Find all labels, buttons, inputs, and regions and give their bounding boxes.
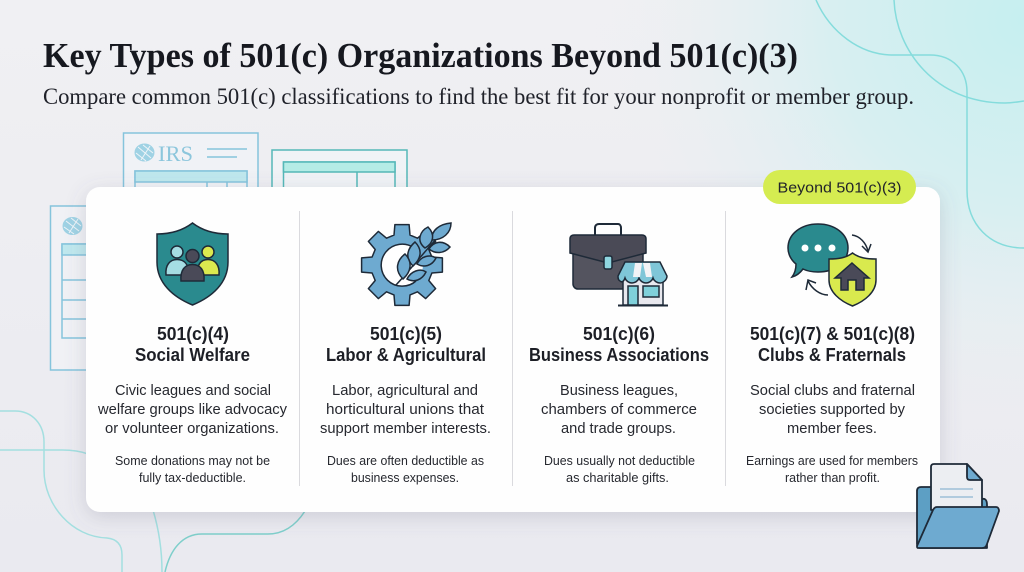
panel: 501(c)(5) Labor & Agricultural — [320, 223, 491, 485]
icon: gear with wheat — [362, 223, 451, 305]
decorative curves top right — [816, 0, 1024, 248]
panel: 501(c)(4) Social Welfare — [97, 223, 287, 485]
note: Dues are often deductible as — [327, 454, 484, 468]
description: Business leagues, — [560, 382, 678, 399]
note — [544, 454, 695, 485]
note: business expenses. — [351, 471, 459, 485]
IRS wordmark: IRS — [158, 141, 193, 166]
note: rather than profit. — [785, 471, 880, 485]
description: and trade groups. — [561, 420, 676, 437]
heading: Clubs & Fraternals — [758, 345, 906, 365]
heading: 501(c)(7) & 501(c)(8) — [750, 324, 915, 344]
description — [320, 382, 491, 437]
description: Civic leagues and social — [115, 382, 271, 399]
note: Earnings are used for members — [746, 454, 918, 468]
icon: briefcase and storefront — [570, 224, 668, 306]
heading: Business Associations — [529, 345, 709, 365]
description: or volunteer organizations. — [105, 420, 279, 437]
note — [327, 454, 484, 485]
heading — [135, 324, 250, 365]
description — [541, 382, 697, 437]
subtitle: Compare common 501(c) classifications to find the best fit for your nonprofit or member group. — [43, 84, 914, 109]
note: as charitable gifts. — [566, 471, 669, 485]
description — [97, 382, 287, 437]
icon: folder with document — [917, 464, 999, 548]
icon: shield with people — [157, 223, 228, 305]
heading — [529, 324, 709, 365]
note: Some donations may not be — [115, 454, 270, 468]
description: welfare groups like advocacy — [97, 401, 287, 418]
IRS form back left — [124, 133, 258, 223]
badge: Beyond 501(c)(3) — [763, 170, 916, 204]
description: Labor, agricultural and — [332, 382, 478, 399]
heading: Social Welfare — [135, 345, 250, 365]
main card — [86, 187, 940, 512]
note: fully tax-deductible. — [139, 471, 246, 485]
title: Key Types of 501(c) Organizations Beyond 501(c)(3) — [43, 37, 798, 75]
description: societies supported by — [759, 401, 905, 418]
description: horticultural unions that — [326, 401, 485, 418]
note — [746, 454, 918, 485]
badge: Beyond 501(c)(3): Beyond 501(c)(3) — [778, 180, 902, 196]
panel: 501(c)(6) Business Associations — [529, 224, 709, 485]
description — [750, 382, 915, 437]
heading: 501(c)(6) — [583, 324, 655, 344]
description: member fees. — [787, 420, 877, 437]
seal small — [62, 217, 82, 235]
icon: chat, shield, house — [788, 224, 876, 306]
heading — [326, 324, 486, 365]
form back center — [272, 150, 407, 210]
description: Social clubs and fraternal — [750, 382, 915, 399]
column dividers — [300, 211, 726, 486]
heading — [750, 324, 915, 365]
heading: 501(c)(5) — [370, 324, 442, 344]
description: chambers of commerce — [541, 401, 697, 418]
IRS seal — [134, 144, 154, 162]
IRS form left — [50, 206, 122, 370]
panel: 501(c)(7) & 501(c)(8) Clubs & Fraternals — [746, 224, 918, 485]
decorative curves bottom left — [0, 411, 305, 572]
description: support member interests. — [320, 420, 491, 437]
note — [115, 454, 270, 485]
heading: Labor & Agricultural — [326, 345, 486, 365]
heading: 501(c)(4) — [157, 324, 229, 344]
note: Dues usually not deductible — [544, 454, 695, 468]
